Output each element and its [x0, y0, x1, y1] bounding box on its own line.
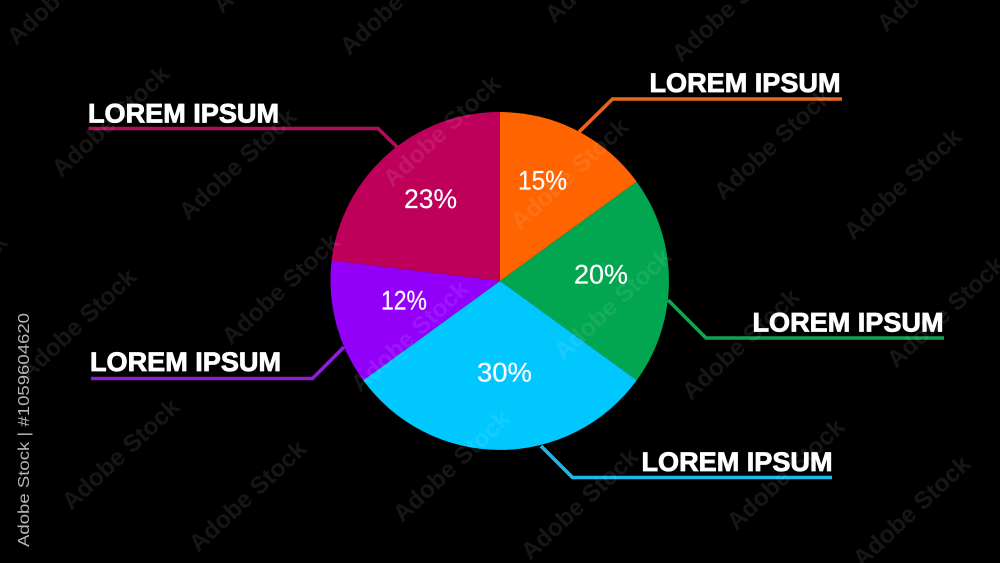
- watermarks: Adobe Stock: [516, 443, 644, 563]
- callout: purple: LOREM IPSUM: [90, 347, 281, 377]
- percentage labels: 12%: [381, 286, 427, 316]
- slice: 30% blue: [363, 281, 637, 450]
- watermarks: Adobe Stock: [378, 70, 506, 193]
- watermarks: Adobe Stock: [722, 413, 850, 536]
- callout: crimson: [88, 98, 397, 147]
- callout: orange: [579, 68, 842, 132]
- watermarks: Adobe Stock: [388, 405, 516, 528]
- watermarks: Adobe Stock: [346, 275, 474, 398]
- watermarks: Adobe Stock: [839, 123, 967, 246]
- watermarks: Adobe Stock: [506, 113, 634, 236]
- percentage labels: 30%: [477, 358, 532, 388]
- callout: orange: LOREM IPSUM: [650, 68, 840, 98]
- stock id text: Adobe Stock | #1059604620: [16, 313, 33, 547]
- pie chart: [330, 112, 669, 450]
- callout: green: [668, 300, 944, 338]
- callout: blue: LOREM IPSUM: [642, 447, 832, 477]
- callout: blue: [541, 446, 832, 478]
- percentage labels: 23%: [404, 184, 457, 214]
- watermarks: Adobe Stock: [677, 283, 805, 406]
- callout: green: LOREM IPSUM: [752, 308, 944, 338]
- percentage labels: 20%: [574, 260, 628, 290]
- watermarks: Adobe Stock: [217, 228, 345, 351]
- watermarks: Adobe Stock: [709, 83, 837, 206]
- percentage labels: [381, 166, 628, 388]
- slice: 15% orange: [500, 112, 637, 281]
- slice: 23% crimson: [332, 112, 500, 281]
- watermarks: Adobe Stock: [184, 435, 312, 558]
- watermarks: Adobe Stock: [174, 103, 302, 226]
- watermarks: Adobe Stock: [57, 393, 185, 516]
- watermarks: Adobe Stock: [14, 263, 142, 386]
- slice: 20% green: [500, 182, 669, 380]
- callout: crimson: LOREM IPSUM: [88, 98, 279, 128]
- watermarks: Adobe Stock: [549, 243, 677, 366]
- watermarks: Adobe Stock: [47, 60, 175, 183]
- slice: 12% purple: [330, 260, 500, 380]
- percentage labels: 15%: [518, 166, 567, 196]
